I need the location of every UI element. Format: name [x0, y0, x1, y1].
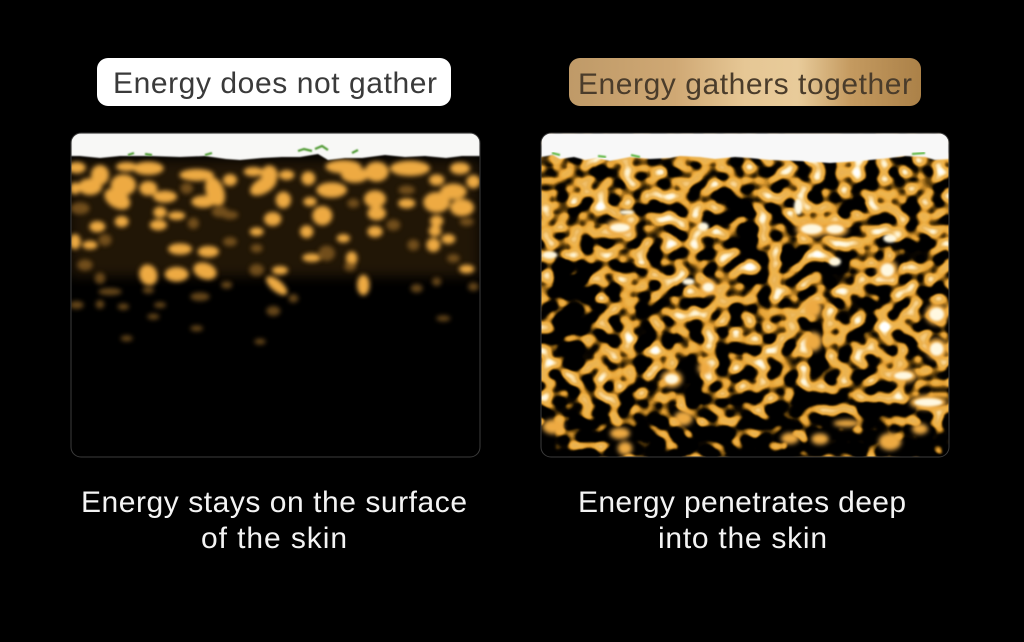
hot spots [543, 199, 944, 406]
speckles: dense gold energy [540, 133, 950, 457]
white surface band [541, 133, 949, 163]
bright gold lower blobs [543, 219, 948, 455]
panel: deep energy scan [540, 133, 950, 457]
label pill: energy does not gather: Energy does not gather [113, 67, 437, 100]
caption: energy penetrates deep [578, 486, 906, 555]
label pill: energy does not gather [97, 58, 451, 106]
white surface band [71, 133, 480, 160]
caption: energy penetrates deep: into the skin [658, 522, 827, 555]
caption: energy penetrates deep: Energy penetrates deep [578, 486, 906, 519]
dim haze behind speckles [70, 160, 480, 277]
caption: energy stays on the surface: of the skin [201, 522, 347, 555]
bright spots [543, 199, 948, 455]
label pill: energy gathers together [569, 58, 921, 106]
caption: energy stays on the surface [81, 486, 467, 555]
speckles: shallow gold energy [68, 160, 480, 345]
caption: energy stays on the surface: Energy stays on the surface [81, 486, 467, 519]
panel: shallow energy scan [68, 133, 480, 457]
label pill: energy gathers together: Energy gathers together [578, 68, 912, 101]
